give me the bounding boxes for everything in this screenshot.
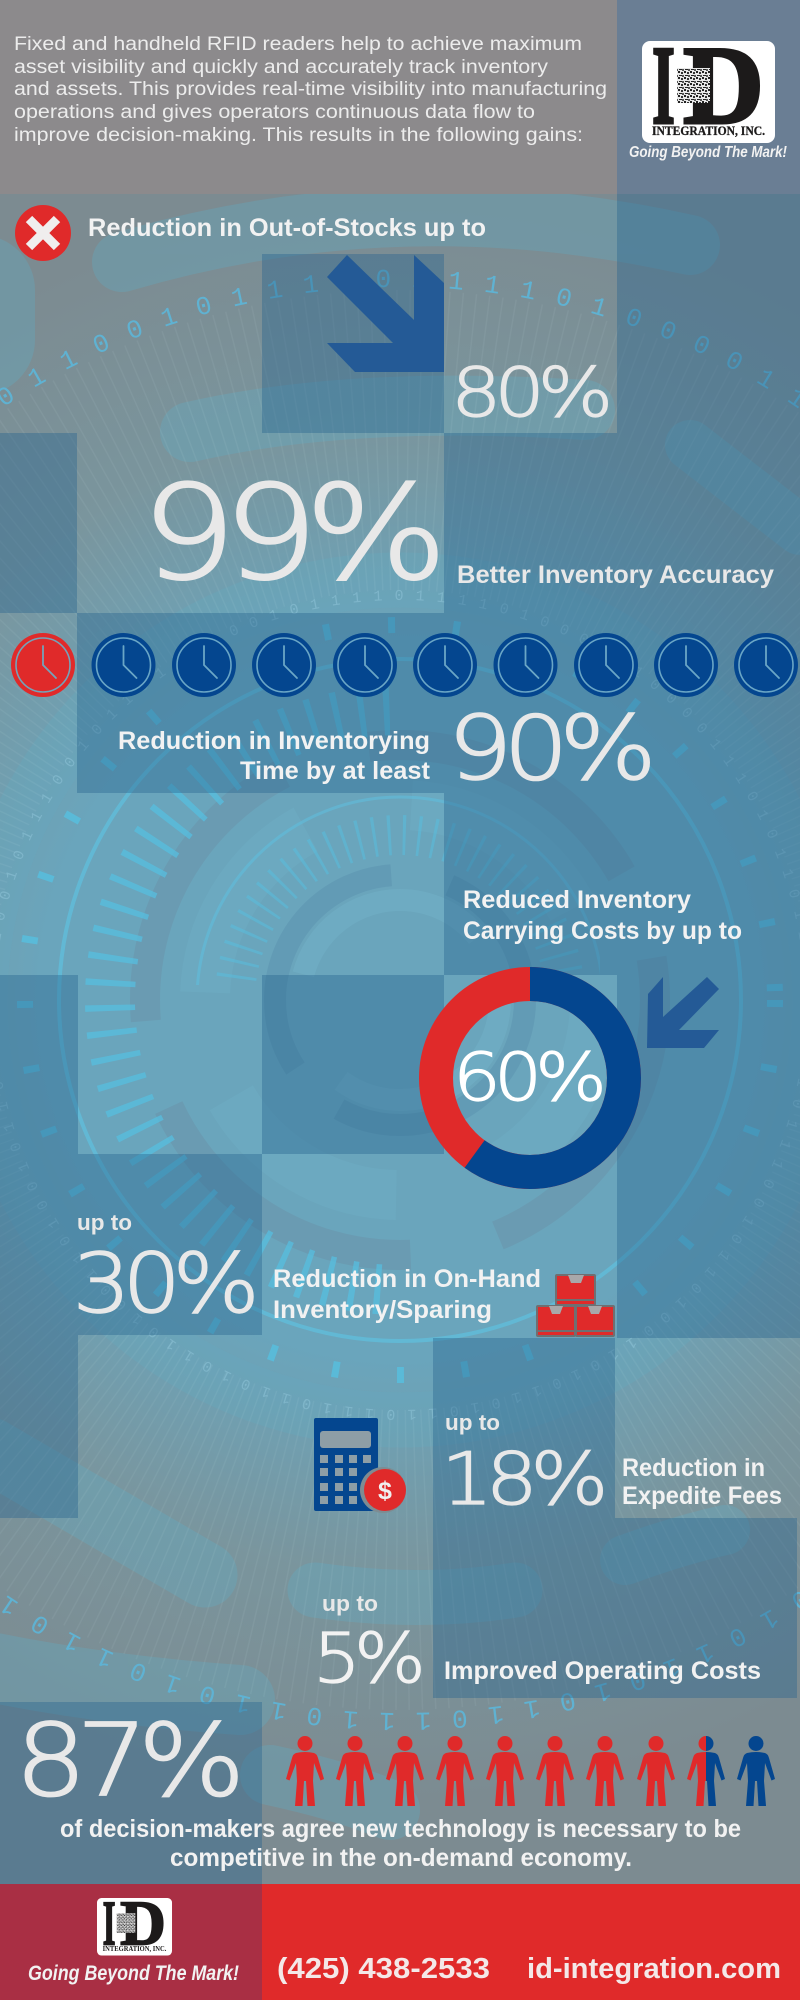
stat: operating costs 5%: [313, 1591, 761, 1699]
decision-makers text: of decision-makers agree new technology is necessary to be: [60, 1815, 741, 1843]
website: id-integration.com: [527, 1953, 781, 1985]
up to label: up to: [445, 1410, 500, 1435]
intro text: and assets. This provides real-time visibility into manufacturing: [14, 79, 607, 100]
decision-makers text: [60, 1815, 741, 1872]
expedite label: Expedite Fees: [622, 1482, 782, 1510]
30 percent: 30%: [72, 1237, 253, 1332]
inventorying label: Reduction in Inventorying: [118, 727, 430, 755]
intro text: Fixed and handheld RFID readers help to achieve maximum: [14, 34, 582, 55]
on-hand label: Inventory/Sparing: [273, 1296, 492, 1324]
on-hand label: [273, 1265, 541, 1324]
stat: carrying costs 60%: [436, 886, 742, 1172]
stat: decision-makers 87%: [24, 1720, 775, 1871]
intro text: improve decision-making. This results in the following gains:: [14, 125, 583, 146]
logo: ID Integration: I: [652, 24, 675, 148]
stat: on-hand inventory 30%: [72, 1210, 614, 1336]
up to label: up to: [322, 1591, 378, 1616]
intro text: operations and gives operators continuous data flow to: [14, 102, 535, 123]
80 percent: 80%: [451, 354, 608, 433]
logo: ID Integration small: INTEGRATION, INC.: [103, 1944, 167, 1953]
icon row: clocks: [11, 633, 798, 697]
decision-makers text: competitive in the on-demand economy.: [170, 1844, 632, 1872]
inventorying label: [118, 727, 431, 785]
footer tagline: Going Beyond The Mark!: [28, 1962, 239, 1985]
logo: ID Integration: [642, 24, 775, 148]
5 percent: 5%: [313, 1619, 421, 1699]
icon row: people: [286, 1736, 775, 1806]
on-hand label: Reduction in On-Hand: [273, 1265, 541, 1293]
operating costs label: Improved Operating Costs: [444, 1657, 761, 1685]
donut chart: [436, 984, 624, 1172]
90 percent: 90%: [448, 697, 650, 800]
arrow: down right: [327, 255, 444, 372]
logo: ID Integration small: D: [120, 1888, 166, 1958]
intro text: [14, 34, 607, 146]
87 percent: 87%: [15, 1702, 237, 1819]
stat: inventory accuracy 99%: [141, 457, 774, 609]
icon: red X: [15, 205, 71, 261]
18 percent: 18%: [441, 1437, 603, 1521]
expedite label: [622, 1454, 782, 1510]
icon: calculator with dollar coin: [314, 1418, 406, 1513]
carrying costs label: Reduced Inventory: [463, 886, 691, 914]
stat: inventorying time 90%: [118, 697, 650, 800]
arrow: down left: [647, 977, 719, 1048]
accuracy label: Better Inventory Accuracy: [457, 561, 774, 589]
panel: footer: [0, 1884, 800, 2000]
icon: calculator with dollar coin: $: [378, 1477, 392, 1505]
inventorying label: Time by at least: [240, 757, 431, 785]
logo: ID Integration small: [97, 1888, 172, 1958]
stat: expedite fees 18%: [314, 1410, 782, 1521]
60 percent: 60%: [453, 1039, 601, 1116]
intro text: asset visibility and quickly and accurately track inventory: [14, 57, 549, 78]
logo: ID Integration small: I: [103, 1888, 116, 1958]
carrying costs label: [463, 886, 742, 945]
icon: stacked boxes: [537, 1275, 614, 1336]
carrying costs label: Carrying Costs by up to: [463, 917, 742, 945]
phone number: (425) 438-2533: [277, 1953, 490, 1985]
up to label: up to: [77, 1210, 132, 1235]
out-of-stocks heading: Reduction in Out-of-Stocks up to: [88, 214, 486, 242]
logo: ID Integration: INTEGRATION, INC.: [652, 123, 765, 138]
99 percent: 99%: [141, 457, 436, 609]
logo: ID Integration: D: [683, 24, 764, 148]
panel: header: [0, 0, 800, 194]
stat: out-of-stocks 80%: [15, 205, 608, 433]
expedite label: Reduction in: [622, 1454, 765, 1482]
